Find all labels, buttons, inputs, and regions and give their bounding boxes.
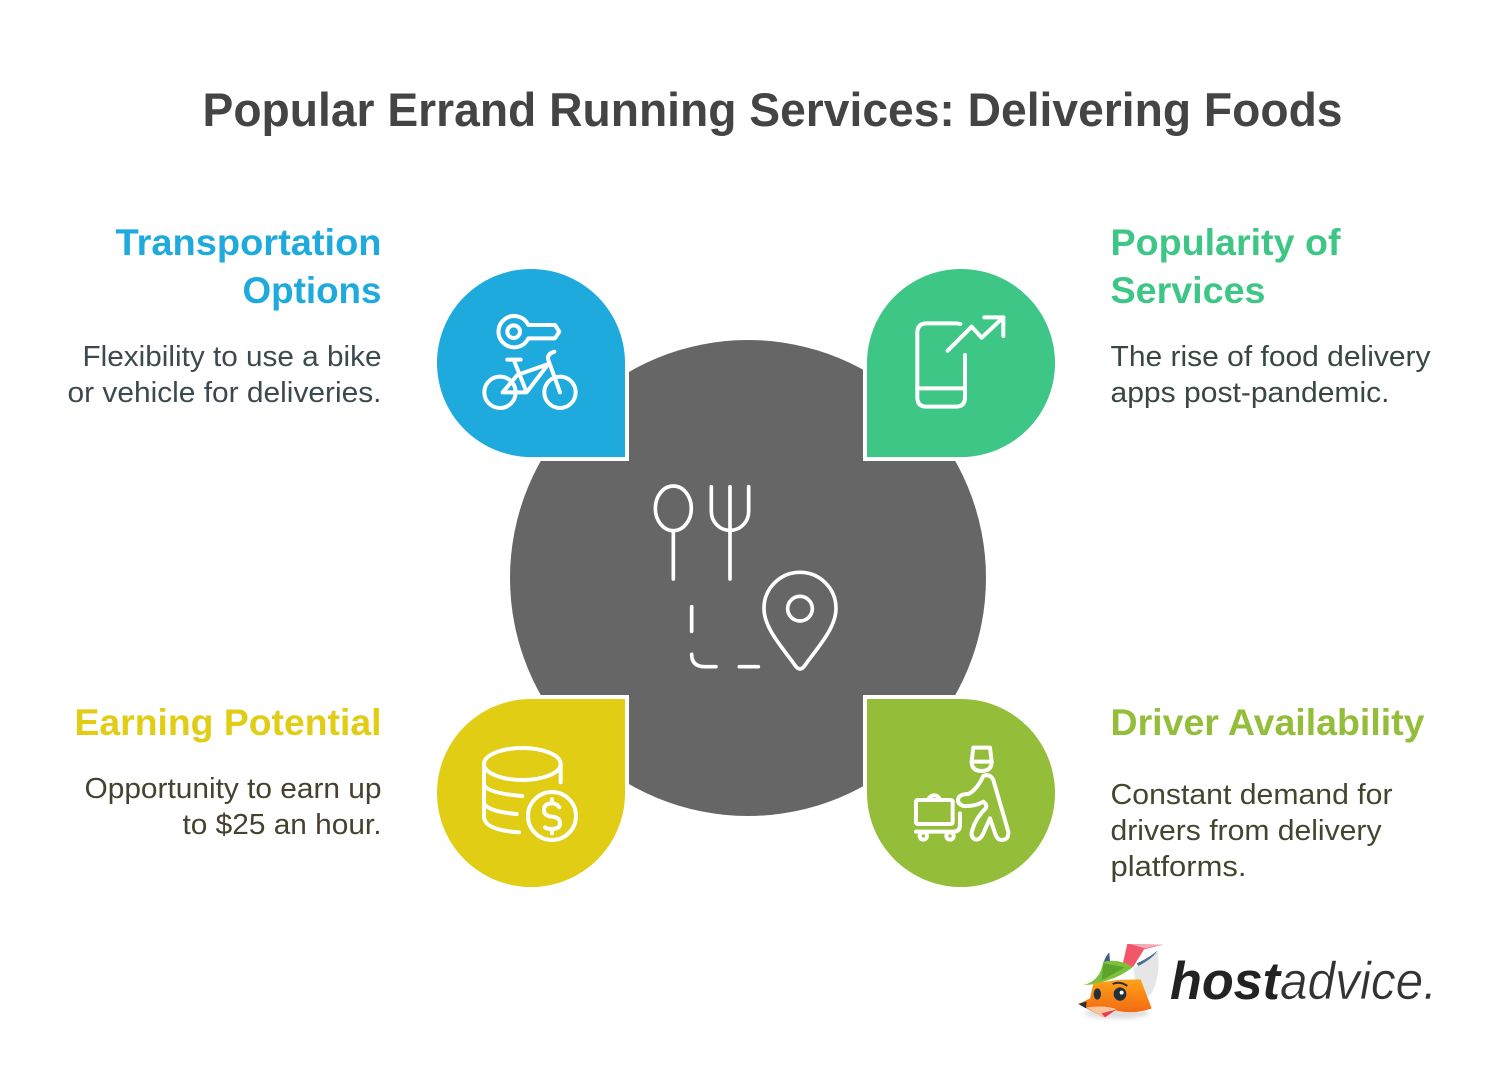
wordmark: host xyxy=(1170,952,1282,1011)
title: Popular Errand Running Services: Delivering Foods xyxy=(202,83,1342,136)
text: earning description: Opportunity to earn up xyxy=(84,773,381,805)
panel: earning potential: to $25 an hour. xyxy=(182,809,382,841)
icon: fox mascot xyxy=(1078,944,1163,1019)
logo: hostadvice xyxy=(1078,944,1437,1019)
icon: spoon, fork and location pin xyxy=(655,486,836,669)
heading: transportation options: Transportation xyxy=(116,222,382,263)
panel: driver availability: platforms. xyxy=(1110,851,1246,883)
petal: blue xyxy=(437,269,625,457)
panel: transportation options xyxy=(68,222,625,457)
heading: popularity of services: Popularity of xyxy=(1110,222,1341,263)
panel: earning potential xyxy=(74,699,625,887)
panel: driver availability xyxy=(867,699,1425,887)
petal: olive xyxy=(867,699,1055,887)
heading: driver availability: Driver Availability xyxy=(1110,702,1425,743)
panel: popularity of services xyxy=(867,222,1431,457)
text: popularity description: The rise of food delivery xyxy=(1110,341,1431,373)
panel: popularity of services: apps post-pandemic. xyxy=(1110,377,1390,409)
petal: yellow xyxy=(437,699,625,887)
heading: earning potential: Earning Potential xyxy=(74,702,382,743)
icon: coins and dollar xyxy=(484,748,576,840)
petal: green xyxy=(867,269,1055,457)
central circle xyxy=(510,340,986,816)
icon: key and bicycle xyxy=(484,316,576,408)
panel: transportation options: Options xyxy=(242,270,382,311)
panel: transportation options: or vehicle for deliveries. xyxy=(68,377,381,409)
panel: driver availability: drivers from delivery xyxy=(1110,815,1382,847)
text: driver description: Constant demand for xyxy=(1110,779,1393,811)
icon: courier with luggage cart xyxy=(916,748,1008,840)
logo: hostadvice: advice. xyxy=(1280,952,1437,1011)
text: transportation description: Flexibility to use a bike xyxy=(82,341,382,373)
icon: phone with rising arrow xyxy=(917,317,1003,407)
panel: popularity of services: Services xyxy=(1110,270,1266,311)
